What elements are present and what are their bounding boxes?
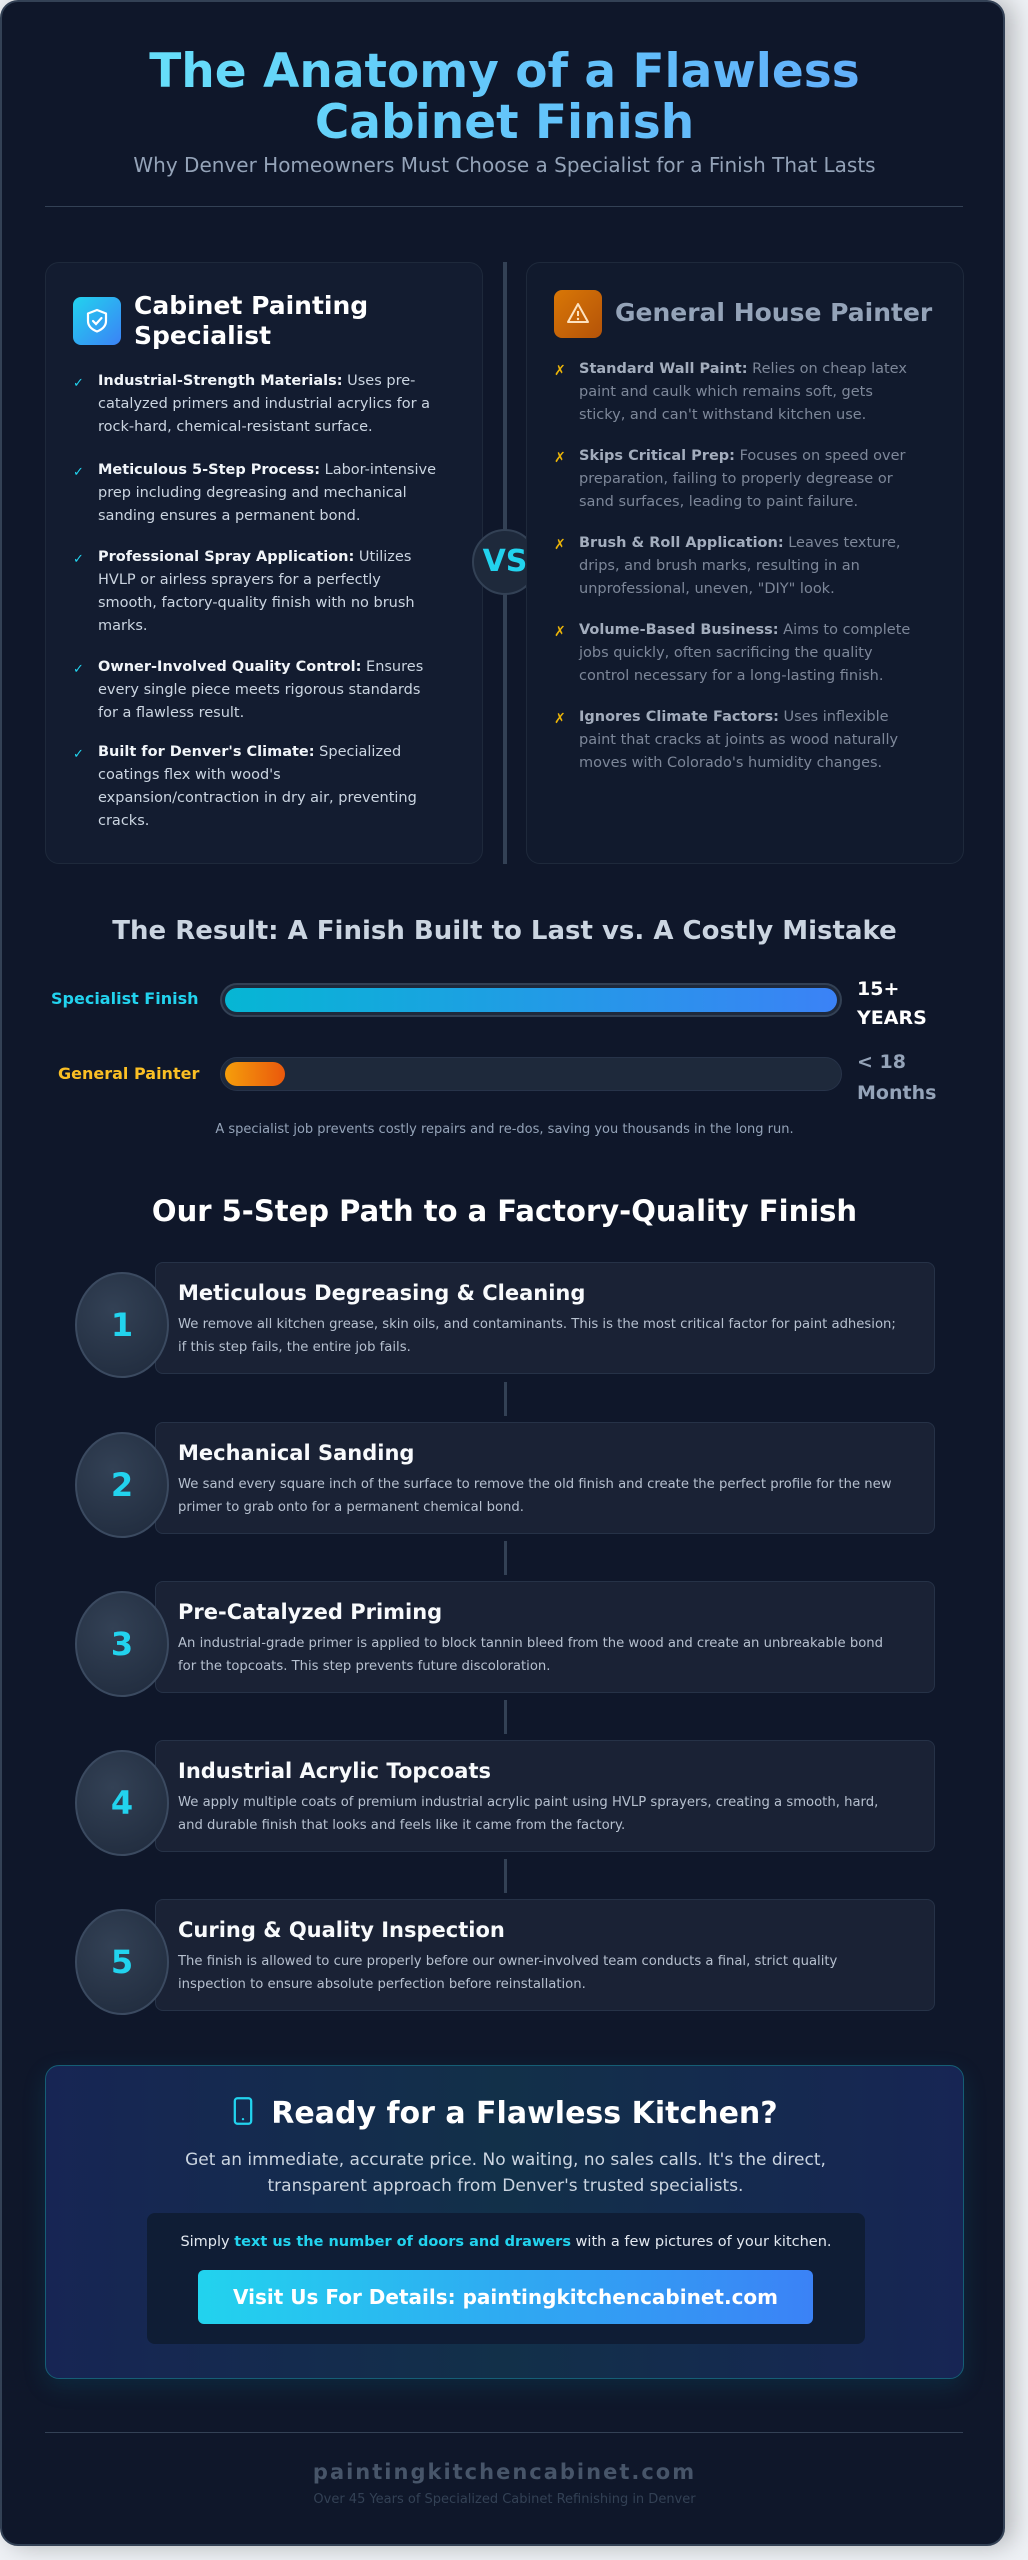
list item 1 — [98, 370, 468, 439]
list item 5: Built for Denver's Climate: Specialized — [98, 744, 401, 760]
title — [2, 46, 1007, 148]
title: The Anatomy of a Flawless — [149, 44, 860, 99]
bar chart: Months — [857, 1082, 936, 1104]
item 1: Standard Wall Paint: Relies on cheap latex paint and caulk which remains soft, gets sticky, and can't withstand kitchen use. — [579, 361, 907, 423]
list item 3: Professional Spray Application: Utilizes — [98, 549, 411, 565]
list item 2: sanding ensures a permanent bond. — [98, 508, 360, 524]
list item 4: every single piece meets rigorous standards — [98, 682, 420, 698]
step 4: We apply multiple coats of premium industrial acrylic paint using HVLP sprayers, creating a smooth, hard, and durable finish that looks and feels like it came from the factory. — [178, 1795, 878, 1833]
title: Cabinet Finish — [315, 95, 694, 150]
bar chart: < 18 — [857, 1051, 906, 1073]
list item 3: smooth, factory-quality finish with no brush — [98, 595, 415, 611]
list item 2: prep including degreasing and mechanical — [98, 485, 407, 501]
footer tagline: Over 45 Years of Specialized Cabinet Refinishing in Denver — [313, 2492, 696, 2507]
step 4 — [75, 1740, 935, 1856]
list item 1: Industrial-Strength Materials: Uses pre- — [98, 373, 415, 389]
heading — [134, 291, 368, 350]
step 4: 4 — [111, 1784, 133, 1822]
list item 3: HVLP or airless sprayers for a perfectly — [98, 572, 381, 588]
VS badge — [472, 529, 538, 595]
CTA text: transparent approach from Denver's trusted specialists. — [268, 2176, 743, 2196]
step 4: Industrial Acrylic Topcoats — [178, 1759, 491, 1783]
list item 1: catalyzed primers and industrial acrylics for a — [98, 396, 430, 412]
result heading: The Result: A Finish Built to Last vs. A Costly Mistake — [112, 916, 897, 946]
icon: warning — [554, 290, 602, 338]
CTA text: Get an immediate, accurate price. No waiting, no sales calls. It's the direct, — [185, 2150, 826, 2170]
button: Visit Us For Details: paintingkitchencabinet.com — [233, 2285, 778, 2309]
item 2: Skips Critical Prep: Focuses on speed over preparation, failing to properly degrease or sand surfaces, leading to paint failure. — [579, 448, 906, 510]
item 4: Volume-Based Business: Aims to complete jobs quickly, often sacrificing the quality control necessary for a long-lasting finish. — [579, 622, 910, 684]
heading: General House Painter — [615, 298, 932, 327]
step 1 — [75, 1262, 935, 1378]
CTA panel — [45, 2065, 964, 2379]
list item 5: cracks. — [98, 813, 149, 829]
item 5: Ignores Climate Factors: Uses inflexible paint that cracks at joints as wood naturally moves with Colorado's humidity changes. — [579, 709, 898, 771]
step 2: We sand every square inch of the surface to remove the old finish and create the perfect profile for the new primer to grab onto for a permanent chemical bond. — [178, 1477, 892, 1515]
CTA text — [185, 2150, 826, 2196]
bar chart: 15+ — [857, 978, 899, 1000]
list item 4: Owner-Involved Quality Control: Ensures — [98, 659, 423, 675]
panel: specialist — [45, 262, 483, 864]
list item 5: coatings flex with wood's — [98, 767, 281, 783]
step 3: 3 — [111, 1625, 133, 1663]
button — [198, 2270, 813, 2324]
heading: Specialist — [134, 321, 271, 350]
list item 5: expansion/contraction in dry air, preventing — [98, 790, 417, 806]
list item 2: Meticulous 5-Step Process: Labor-intensive — [98, 462, 436, 478]
step 5 — [75, 1899, 935, 2015]
CTA heading with phone icon: Ready for a Flawless Kitchen? — [271, 2096, 778, 2131]
footer brand: paintingkitchencabinet.com — [313, 2460, 696, 2484]
step 2: Mechanical Sanding — [178, 1441, 414, 1465]
list item 5 — [98, 741, 468, 833]
list item 3 — [98, 546, 468, 638]
list item 3: marks. — [98, 618, 148, 634]
list item 4 — [98, 656, 468, 725]
specialist bar: Specialist Finish — [51, 989, 199, 1008]
panel: general painter — [526, 262, 964, 864]
list item 1: rock-hard, chemical-resistant surface. — [98, 419, 373, 435]
step 1: Meticulous Degreasing & Cleaning — [178, 1281, 585, 1305]
icon: shield — [73, 297, 121, 345]
general bar: General Painter — [58, 1064, 199, 1083]
bar chart — [51, 978, 936, 1104]
step 2: 2 — [111, 1466, 133, 1504]
step 2 — [75, 1422, 935, 1538]
list item 4: for a flawless result. — [98, 705, 244, 721]
step 5: Curing & Quality Inspection — [178, 1918, 505, 1942]
note: A specialist job prevents costly repairs and re-dos, saving you thousands in the long run. — [215, 1122, 794, 1137]
heading: Cabinet Painting — [134, 291, 368, 320]
step 5: The finish is allowed to cure properly before our owner-involved team conducts a final, strict quality inspection to ensure absolute perfection before reinstallation. — [178, 1954, 837, 1992]
inner box — [147, 2213, 865, 2344]
bar chart: YEARS — [857, 1007, 927, 1029]
item 3: Brush & Roll Application: Leaves texture, drips, and brush marks, resulting in an unprofessional, uneven, "DIY" look. — [579, 535, 901, 597]
step 1: 1 — [111, 1306, 133, 1344]
steps heading: Our 5-Step Path to a Factory-Quality Finish — [152, 1194, 857, 1228]
subtitle: Why Denver Homeowners Must Choose a Specialist for a Finish That Lasts — [133, 153, 876, 177]
VS badge: VS — [483, 544, 527, 579]
list item 2 — [98, 459, 468, 528]
step 5: 5 — [111, 1943, 133, 1981]
step 3: An industrial-grade primer is applied to block tannin bleed from the wood and create an unbreakable bond for the topcoats. This step prevents future discoloration. — [178, 1636, 883, 1674]
step 1: We remove all kitchen grease, skin oils, and contaminants. This is the most critical factor for paint adhesion; if this step fails, the entire job fails. — [178, 1317, 896, 1355]
step 3 — [75, 1581, 935, 1697]
inner box: Simply text us the number of doors and drawers with a few pictures of your kitchen. — [180, 2234, 832, 2250]
step 3: Pre-Catalyzed Priming — [178, 1600, 442, 1624]
